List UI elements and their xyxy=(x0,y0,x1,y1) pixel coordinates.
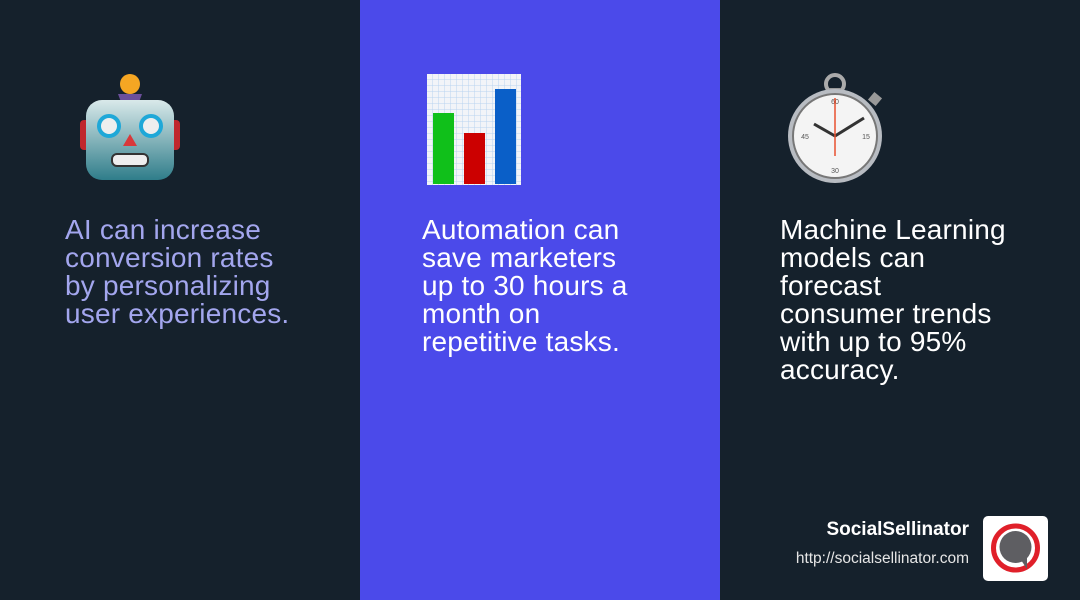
icon: stopwatch xyxy=(788,73,882,183)
panel: AI xyxy=(0,0,360,600)
text: AI stat: by personalizing xyxy=(65,270,271,301)
icon: stopwatch: 45 xyxy=(801,134,809,141)
text: ML stat: consumer trends xyxy=(780,298,992,329)
text: Automation stat: repetitive tasks. xyxy=(422,326,620,357)
text: ML stat: with up to 95% xyxy=(780,326,966,357)
text: Automation stat: up to 30 hours a xyxy=(422,270,628,301)
icon: stopwatch: 15 xyxy=(862,134,870,141)
panel: Machine Learning xyxy=(720,0,1080,600)
brand block xyxy=(796,516,1048,581)
icon: stopwatch: 60 xyxy=(831,99,839,106)
text: AI stat: AI can increase xyxy=(65,214,261,245)
icon: robot xyxy=(80,74,180,180)
text: Automation stat: save marketers xyxy=(422,242,616,273)
text: AI stat: user experiences. xyxy=(65,298,289,329)
brand name: SocialSellinator xyxy=(826,519,969,540)
text: ML stat: models can xyxy=(780,242,925,273)
brand url: http://socialsellinator.com xyxy=(796,550,969,567)
text: AI stat xyxy=(65,214,289,329)
text: ML stat: forecast xyxy=(780,270,881,301)
logo xyxy=(983,516,1048,581)
text: Automation stat: month on xyxy=(422,298,540,329)
icon: bar chart xyxy=(427,74,521,185)
panel: Automation xyxy=(360,0,720,600)
text: ML stat: Machine Learning xyxy=(780,214,1006,245)
text: ML stat: accuracy. xyxy=(780,354,900,385)
text: Automation stat: Automation can xyxy=(422,214,619,245)
icon: stopwatch: 30 xyxy=(831,168,839,175)
text: AI stat: conversion rates xyxy=(65,242,274,273)
text: Automation stat xyxy=(422,214,628,357)
text: ML stat xyxy=(780,214,1006,385)
